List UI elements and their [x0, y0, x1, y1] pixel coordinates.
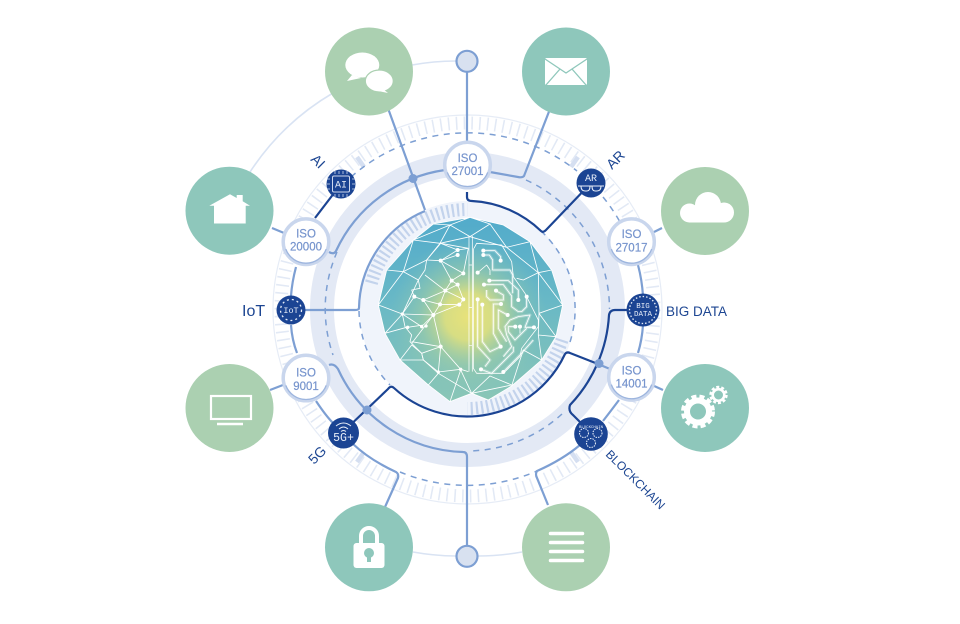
label: AI: AI: [308, 151, 329, 171]
pale outer links: [250, 61, 522, 556]
brain polygon: [378, 217, 563, 402]
tech node: BIG DATA: BIG: [636, 303, 650, 311]
tech node: AI: [326, 170, 356, 198]
label: AR: AR: [603, 147, 628, 172]
tech node: BIG DATA: [626, 294, 660, 326]
badge: ISO 9001: [283, 355, 329, 401]
icon: chat bubbles: [325, 28, 413, 116]
tech node: AI: AI: [335, 180, 347, 192]
medium circuit lines: [270, 60, 663, 556]
right hemisphere circuit: [473, 243, 538, 374]
label: 5G: 5G: [305, 443, 329, 467]
tech node: 5G: [328, 418, 359, 448]
tech node: IoT: IoT: [283, 306, 299, 316]
brain glow: [378, 217, 563, 402]
badge: ISO 27017: [609, 219, 654, 264]
tech node: AR: AR: [585, 174, 597, 185]
central brain: [378, 217, 563, 402]
junction dots: [362, 174, 604, 414]
icon: document lines: [522, 503, 610, 591]
badge: ISO 27017: ISO: [622, 229, 641, 241]
badge: ISO 27001: [445, 142, 490, 188]
node: top connector: [456, 51, 478, 72]
brain midline: [469, 236, 472, 372]
tech node: BLOCKCHAIN: [574, 417, 608, 451]
badge: ISO 14001: [609, 354, 654, 400]
polygon mesh: [378, 217, 563, 402]
badge: ISO 27001: ISO: [458, 153, 477, 165]
dark circuit lines: [315, 183, 628, 433]
label: IoT: IoT: [242, 303, 265, 320]
icon: envelope: [522, 28, 610, 116]
badge: ISO 20000: ISO: [296, 229, 316, 241]
node: bottom connector: [456, 546, 478, 567]
outer tick ring: [273, 115, 662, 504]
badge: ISO 9001: ISO: [296, 368, 316, 380]
tech node: IoT: [276, 296, 306, 324]
dashed circuit arcs: [325, 133, 620, 485]
badge: ISO 14001: 14001: [616, 378, 647, 390]
badge: ISO 9001: 9001: [293, 381, 319, 393]
icon: house: [186, 167, 274, 255]
icon: padlock: [325, 503, 413, 591]
left hemisphere mesh: [401, 243, 468, 374]
label: BLOCKCHAIN: BLOCKCHAIN: [603, 447, 668, 512]
tech node: 5G: 5G+: [333, 432, 354, 445]
tech node: BLOCKCHAIN: BLOCKCHAIN: [579, 426, 604, 430]
badge: ISO 14001: ISO: [622, 365, 641, 377]
badge: ISO 27017: 27017: [616, 243, 647, 255]
label: BIG DATA: BIG DATA: [666, 304, 727, 319]
inner tick arcs: [371, 210, 562, 408]
icon: gears: [661, 364, 749, 452]
badge: ISO 20000: [283, 219, 329, 264]
inner pale disc: [360, 201, 576, 417]
badge: ISO 20000: 20000: [290, 242, 322, 254]
icon: monitor: [186, 364, 274, 452]
tech node: BIG DATA: DATA: [634, 311, 652, 319]
icon: cloud: [661, 167, 749, 255]
ring band: [322, 164, 613, 455]
tech node: AR: [576, 168, 606, 198]
badge: ISO 27001: 27001: [452, 166, 483, 178]
